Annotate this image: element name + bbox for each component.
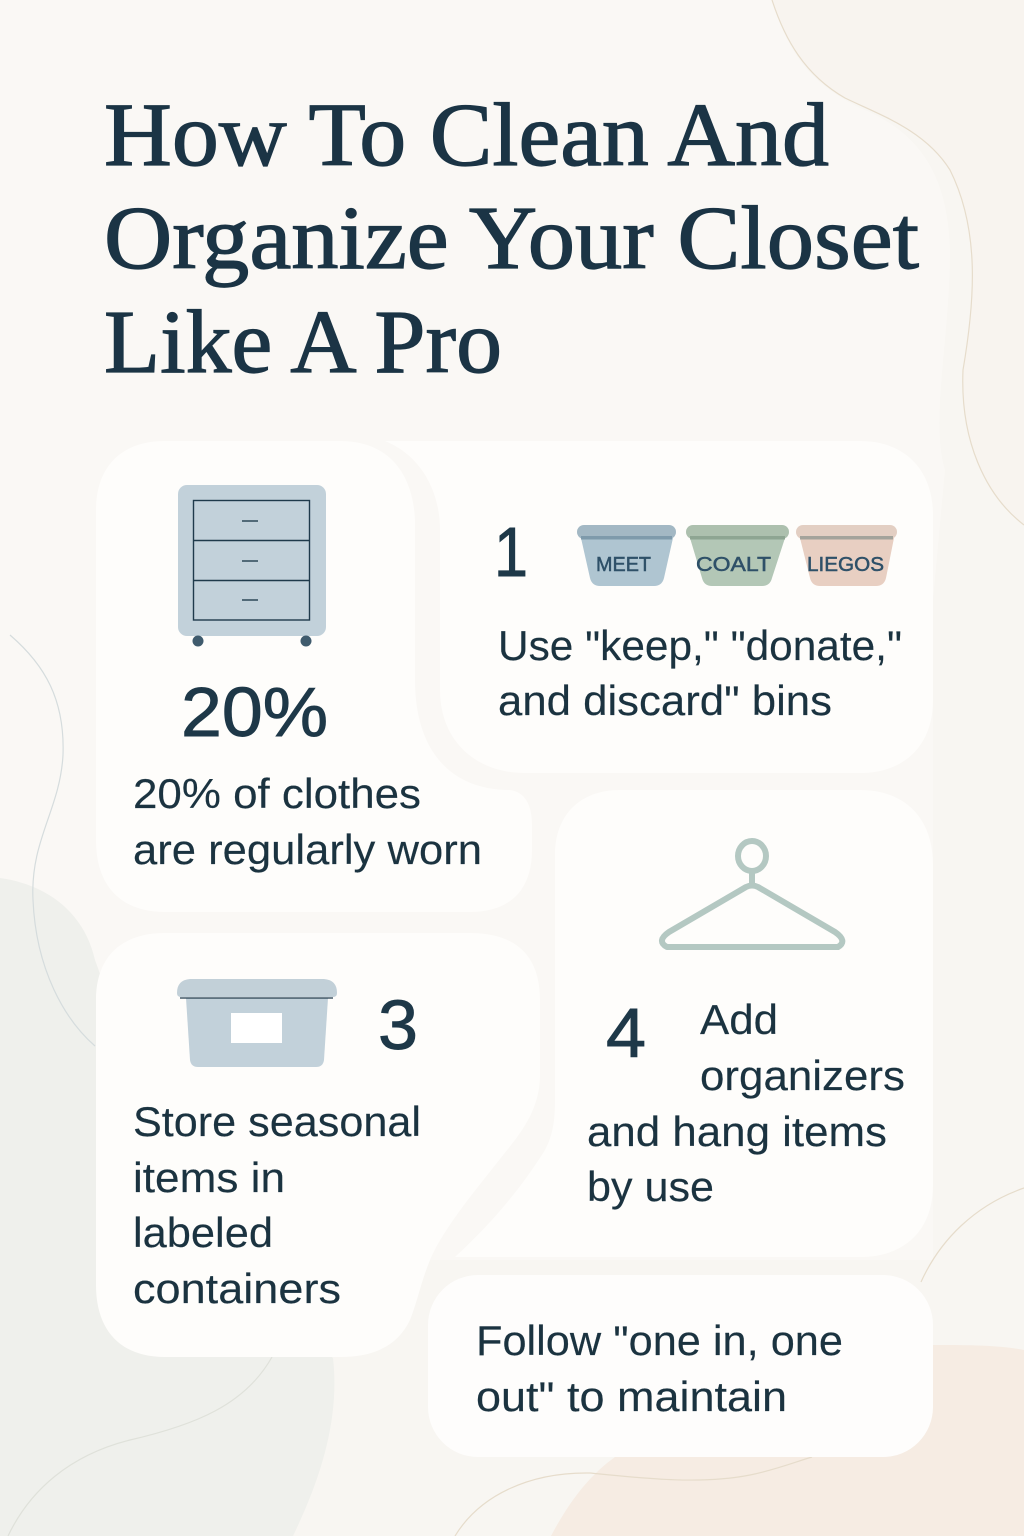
title: Organize Your Closet (104, 189, 919, 288)
step 3 text: Store seasonal (133, 1098, 421, 1145)
step 1 text: and discard" bins (498, 677, 832, 724)
icon: green bin: COALT (696, 554, 771, 576)
step 1 text (498, 622, 902, 724)
step 3 text: items in (133, 1154, 285, 1201)
icon: green bin (686, 525, 789, 586)
panel: step 4 hanger (455, 790, 933, 1257)
icon: storage container (177, 979, 337, 1067)
panel: maintain rule (428, 1275, 933, 1457)
stat description: 20% of clothes (133, 770, 421, 817)
step 3 text (133, 1098, 421, 1312)
step number 4: 4 (606, 994, 646, 1072)
panel: step 3 container (96, 933, 540, 1357)
step number 1: 1 (494, 513, 528, 591)
step 4 text (587, 996, 905, 1210)
icon: peach bin: LIEGOS (807, 554, 884, 576)
icon: peach bin (796, 525, 897, 586)
icon: drawer cabinet (178, 485, 326, 646)
panel: step 1 bins (385, 441, 933, 773)
step 3 text: containers (133, 1265, 341, 1312)
icon: hanger (662, 841, 842, 947)
maintain text (476, 1317, 843, 1420)
title: Like A Pro (104, 293, 502, 392)
maintain text: Follow "one in, one (476, 1317, 843, 1364)
panel: 20% statistic (96, 441, 532, 912)
maintain text: out" to maintain (476, 1373, 787, 1420)
stat: 20%: 20% (181, 673, 328, 751)
step 4 text: Add (700, 996, 778, 1043)
step 1 text: Use "keep," "donate," (498, 622, 902, 669)
step 3 text: labeled (133, 1209, 273, 1256)
step 4 text: and hang items (587, 1108, 887, 1155)
stat description: are regularly worn (133, 826, 482, 873)
stat description (133, 770, 482, 873)
step number 3: 3 (378, 986, 418, 1064)
step 4 text: by use (587, 1163, 714, 1210)
step 4 text: organizers (700, 1052, 905, 1099)
icon: blue bin: MEET (596, 554, 651, 576)
title: How To Clean And (104, 86, 829, 185)
icon: blue bin (577, 525, 676, 586)
title (104, 86, 919, 392)
